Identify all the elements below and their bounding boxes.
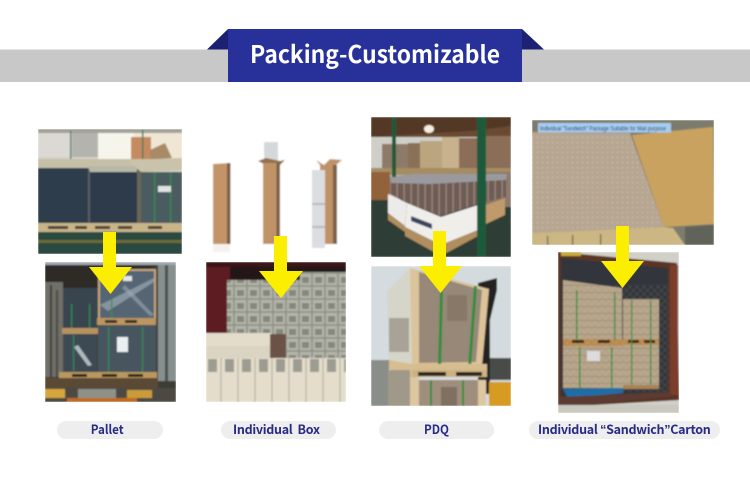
label: sandwich package caption [538,123,671,132]
label: PDQ [379,419,494,439]
photo: sandwich board sheets [532,120,714,245]
photo: stacked pallets in warehouse [38,129,182,254]
arrow: individual box [259,236,303,298]
arrow: PDQ [419,231,462,293]
label: PDQ: PDQ [424,419,449,438]
label: sandwich package caption: Individual "Sandwich" Package Suitable for Mail purpose [540,125,666,132]
photo: pallets loaded in container [45,262,176,402]
label: Pallet: Pallet [91,419,124,438]
photo: PDQ crate on forklift [371,266,511,406]
photo: cartons loaded in container [206,262,346,402]
arrow: sandwich carton [601,226,644,288]
photo: sandwich cartons in container [558,252,679,413]
label: Individual Sandwich Carton: Individual “Sandwich”Carton [538,419,711,438]
header ribbon [207,29,544,82]
arrow: pallet [89,232,132,294]
title: Packing-Customizable [250,35,500,70]
header band [0,29,750,82]
label: Pallet [57,419,163,439]
label: Individual Box: Individual Box [233,419,320,438]
photo: PDQ pallets in warehouse [371,117,511,257]
photo: individual cardboard tube boxes [206,112,346,254]
